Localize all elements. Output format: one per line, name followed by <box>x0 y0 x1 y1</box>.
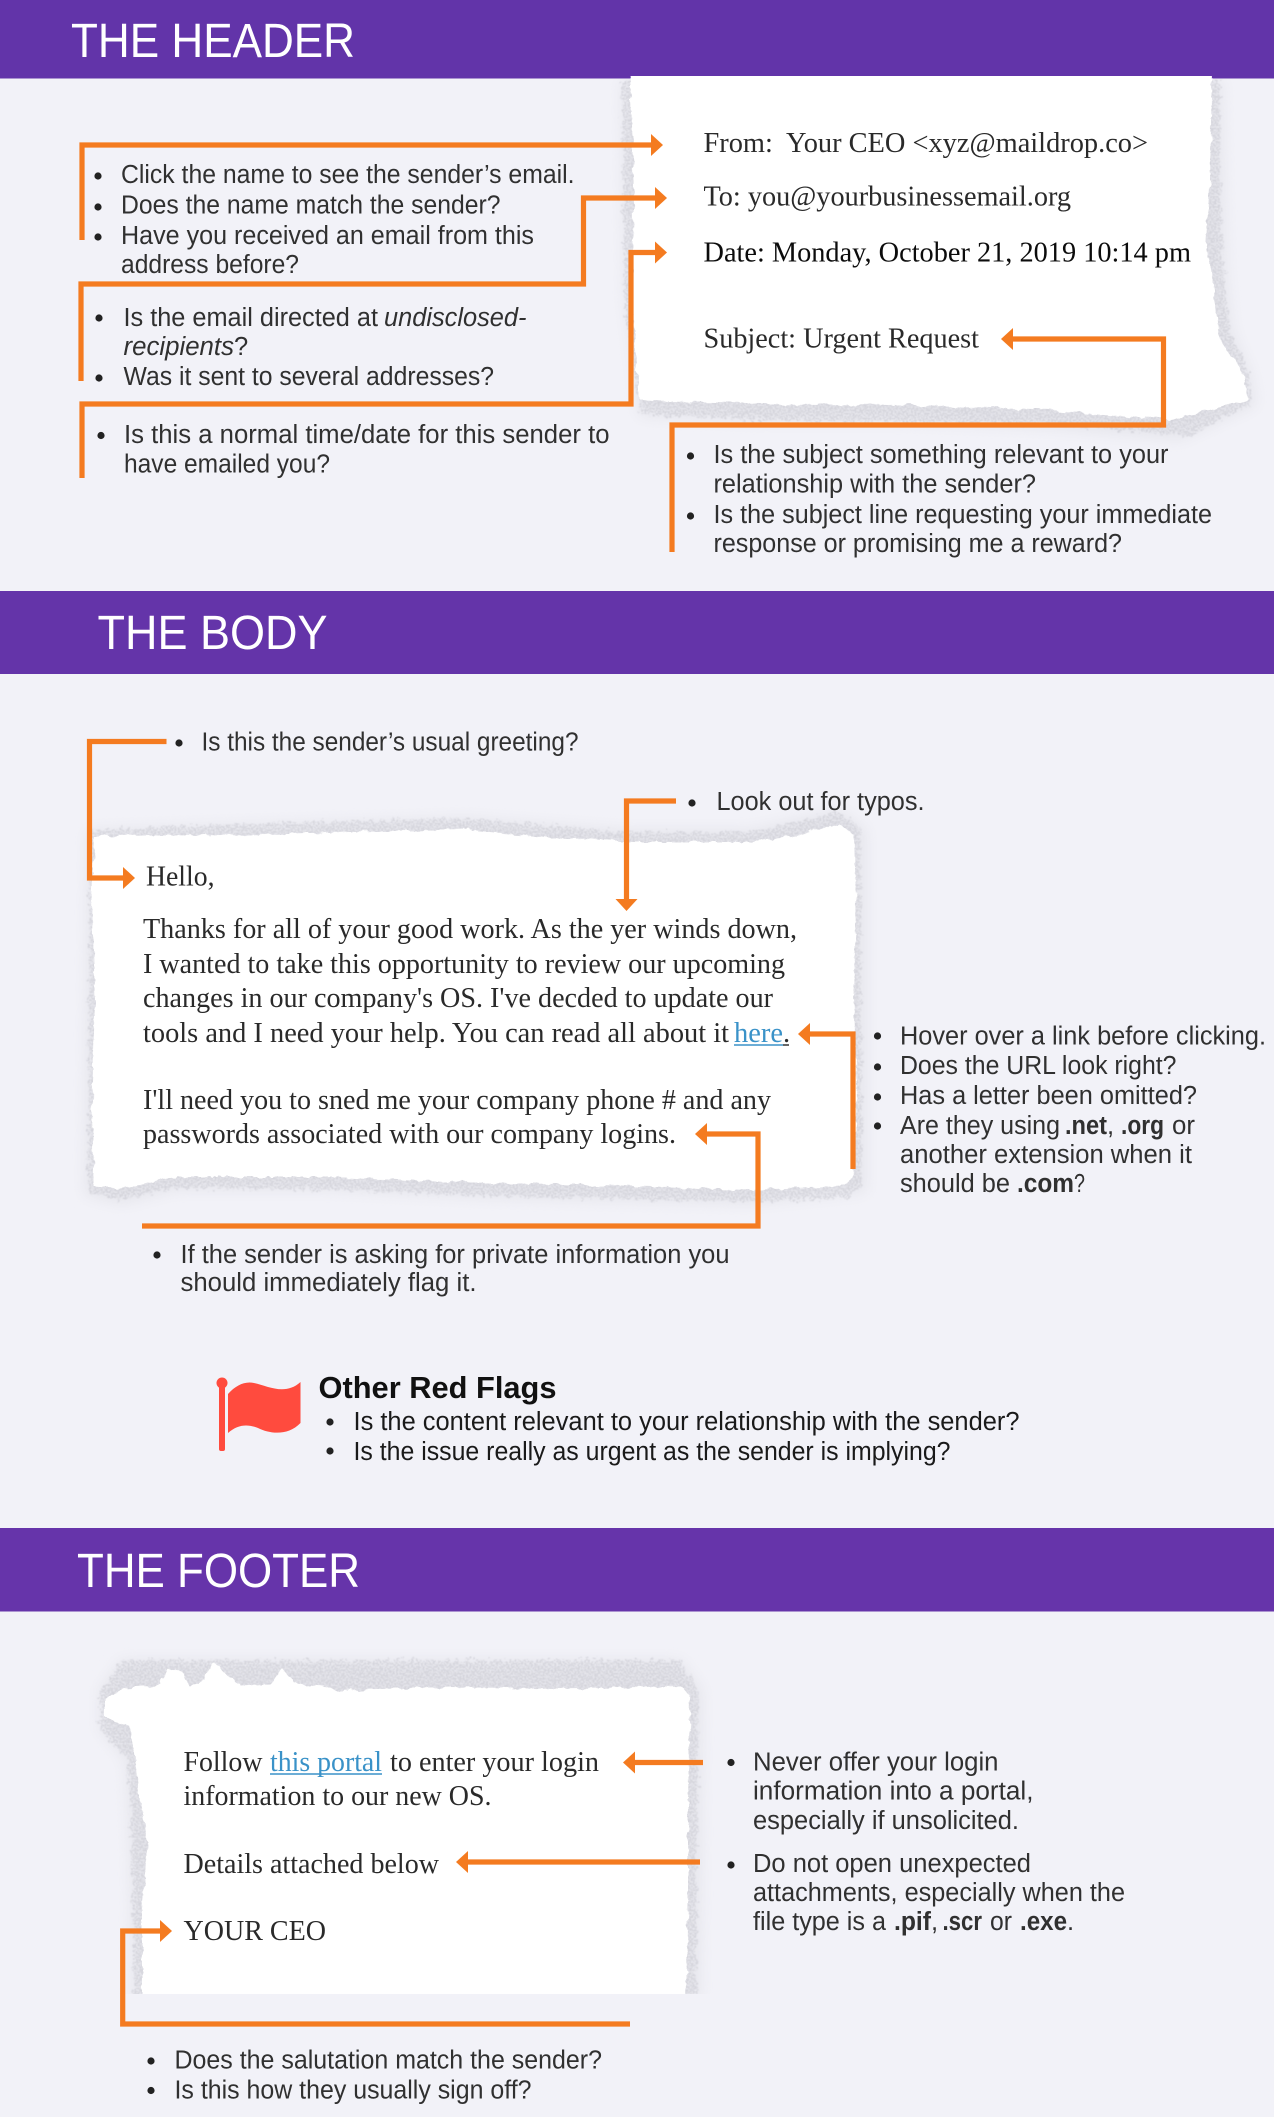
bullet list: link checks: .net <box>1065 1112 1107 1140</box>
bullet list: attachment advice <box>727 1850 1125 1936</box>
section band: the header <box>0 0 1274 78</box>
bullet list: date check <box>97 421 609 478</box>
panel: email header card <box>622 70 1256 440</box>
bullet list: sender checks: Have you received an email from this <box>121 222 534 250</box>
bullet list: attachment advice: or <box>990 1908 1012 1936</box>
bullet list: recipient checks: recipients <box>124 333 234 361</box>
bullet list: link checks <box>874 1022 1266 1198</box>
bullet: greeting check: Is this the sender’s usual greeting? <box>202 728 578 756</box>
arrow: subject <box>672 328 1164 552</box>
section band: the body <box>0 591 1274 674</box>
footer signature: YOUR CEO <box>184 1916 326 1947</box>
callout list <box>326 1408 1019 1466</box>
body paragraph two <box>143 1085 772 1150</box>
body paragraph two: passwords associated with our company logins. <box>143 1119 676 1150</box>
bullet list: subject checks: Is the subject something relevant to your <box>714 441 1169 469</box>
bullet list: attachment advice: .pif <box>894 1908 931 1936</box>
callout: other red flags <box>318 1370 1020 1466</box>
arrow: private information <box>142 1123 758 1226</box>
body greeting: Hello, <box>146 862 214 892</box>
bullet list: link checks: or <box>1172 1112 1196 1140</box>
bullet list: subject checks: Is the subject line requesting your immediate <box>714 501 1212 529</box>
arrow: salutation <box>123 1920 630 2024</box>
body paragraph one: tools and I need your help. You can read all about it <box>143 1018 729 1049</box>
bullet list: salutation checks: Does the salutation match the sender? <box>174 2046 602 2074</box>
body paragraph one: I wanted to take this opportunity to review our upcoming <box>143 949 785 980</box>
bullet list: sender checks <box>94 161 575 279</box>
bullet list: salutation checks <box>147 2046 602 2104</box>
heading: the footer: THE FOOTER <box>77 1545 360 1598</box>
arrow: typos <box>616 801 676 911</box>
bullet list: subject checks <box>687 441 1212 558</box>
section band: the footer <box>0 1528 1274 1612</box>
bullet list: sender checks: Does the name match the sender? <box>121 192 500 220</box>
body paragraph one: . <box>783 1018 790 1049</box>
arrow: attachment <box>456 1851 700 1873</box>
bullet list: date check: Is this a normal time/date for this sender to <box>124 421 610 449</box>
bullet list: link checks: .com <box>1017 1170 1074 1198</box>
bullet list: salutation checks: Is this how they usually sign off? <box>174 2076 532 2104</box>
footer attachment line: Details attached below <box>184 1849 439 1880</box>
panel: email footer card <box>100 1660 702 2005</box>
arrow: portal <box>623 1752 703 1774</box>
footer portal sentence: Follow <box>184 1747 263 1778</box>
email to line: To: you@yourbusinessemail.org <box>704 182 1071 212</box>
bullet list: link checks: .org <box>1121 1112 1164 1140</box>
bullet list: portal advice: especially if unsolicited. <box>753 1807 1019 1835</box>
bullet: private information: should immediately flag it. <box>180 1269 476 1297</box>
body paragraph one: changes in our company's OS. I've decded to update our <box>143 983 773 1014</box>
email date line: Date: Monday, October 21, 2019 10:14 pm <box>704 238 1191 268</box>
bullet: typos: Look out for typos. <box>716 788 924 816</box>
bullet list: subject checks: response or promising me a reward? <box>714 530 1122 558</box>
email from line: From: Your CEO <xyz@maildrop.co> <box>704 128 1148 159</box>
bullet list: date check: have emailed you? <box>124 450 330 478</box>
bullet list: attachment advice: file type is a <box>753 1908 887 1936</box>
bullet list: link checks: another extension when it <box>900 1141 1192 1169</box>
heading: the body: THE BODY <box>98 607 328 660</box>
heading: the header: THE HEADER <box>71 15 355 68</box>
body paragraph one: here <box>734 1018 783 1049</box>
bullet list: recipient checks: Was it sent to several addresses? <box>124 363 494 391</box>
footer portal sentence: information to our new OS. <box>184 1781 492 1812</box>
bullet list: recipient checks <box>95 304 527 391</box>
icon: red flag <box>216 1378 300 1451</box>
bullet list: attachment advice: .exe <box>1020 1908 1067 1936</box>
bullet: private information <box>153 1241 729 1297</box>
bullet list: link checks: should be <box>900 1170 1010 1198</box>
bullet list: attachment advice: .scr <box>942 1908 982 1936</box>
bullet list: recipient checks: undisclosed- <box>384 304 526 332</box>
bullet list: subject checks: relationship with the sender? <box>714 470 1036 498</box>
bullet list: sender checks: address before? <box>121 251 299 279</box>
callout heading: Other Red Flags <box>318 1370 556 1405</box>
footer portal sentence: this portal <box>270 1747 382 1778</box>
arrow: link <box>798 1023 853 1169</box>
arrow: greeting <box>90 742 166 889</box>
bullet list: link checks: , <box>1107 1112 1114 1140</box>
arrow: sender name <box>82 134 663 240</box>
bullet list: portal advice: information into a portal, <box>753 1778 1034 1806</box>
callout list: Is the content relevant to your relationship with the sender? <box>354 1408 1020 1436</box>
bullet list: link checks: Are they using <box>900 1112 1060 1140</box>
footer portal sentence <box>184 1747 599 1812</box>
body paragraph one: Thanks for all of your good work. As the yer winds down, <box>143 914 797 945</box>
bullet list: recipient checks: Is the email directed at <box>124 304 378 332</box>
bullet list: portal advice: Never offer your login <box>753 1748 998 1776</box>
arrow: date <box>82 242 667 478</box>
callout list: Is the issue really as urgent as the sender is implying? <box>354 1438 950 1466</box>
bullet list: attachment advice: attachments, especially when the <box>753 1879 1125 1907</box>
arrow: recipient <box>81 187 667 381</box>
panel: email body card <box>85 810 866 1204</box>
bullet list: link checks: Does the URL look right? <box>900 1052 1176 1080</box>
bullet list: attachment advice: . <box>1067 1908 1074 1936</box>
bullet list: link checks: Hover over a link before clicking. <box>900 1022 1266 1050</box>
bullet list: link checks: ? <box>1074 1170 1085 1198</box>
bullet list: sender checks: Click the name to see the sender’s email. <box>121 161 574 189</box>
bullet list: recipient checks: ? <box>234 333 248 361</box>
bullet list: attachment advice: , <box>931 1908 938 1936</box>
bullet list: attachment advice: Do not open unexpected <box>753 1850 1031 1878</box>
bullet: private information: If the sender is asking for private information you <box>180 1241 730 1269</box>
bullet list: portal advice <box>727 1748 1034 1835</box>
email subject line: Subject: Urgent Request <box>704 324 979 354</box>
footer portal sentence: to enter your login <box>390 1747 599 1778</box>
bullet list: link checks: Has a letter been omitted? <box>900 1082 1197 1110</box>
body paragraph two: I'll need you to sned me your company phone # and any <box>143 1085 772 1116</box>
body paragraph one <box>143 914 797 1049</box>
